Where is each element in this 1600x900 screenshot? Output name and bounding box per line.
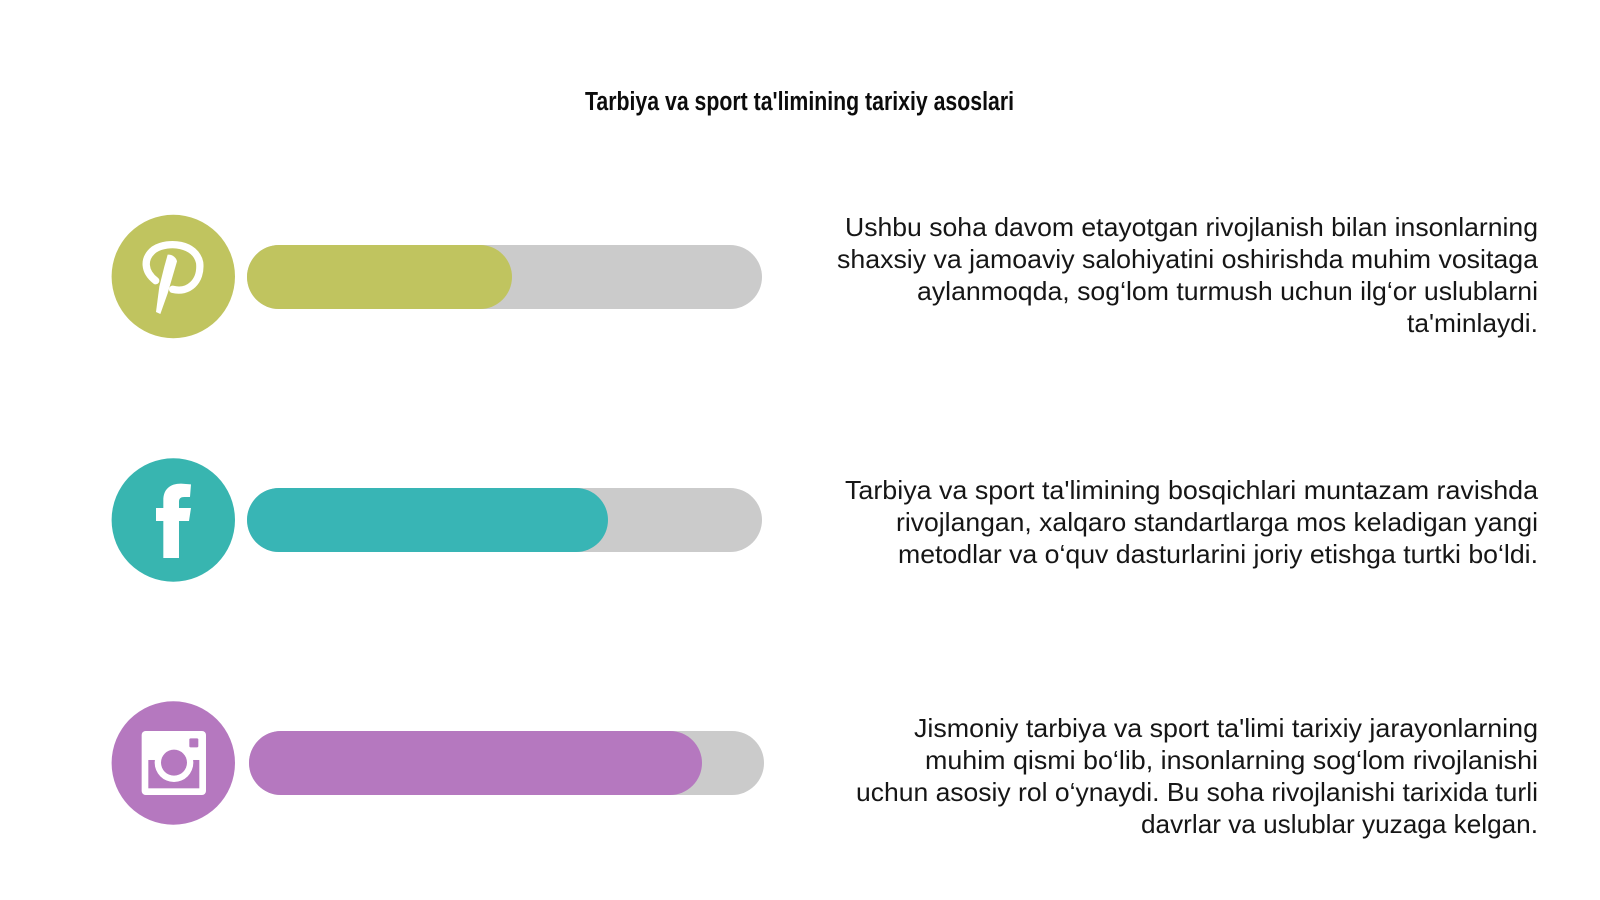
panel: row 3 — [112, 701, 1538, 839]
progress bar: teal — [247, 488, 762, 552]
text block 1 — [837, 212, 1539, 338]
text block 3: uchun asosiy rol o‘ynaydi. Bu soha rivojlanishi tarixida turli — [856, 777, 1538, 807]
text block 2: Tarbiya va sport ta'limining bosqichlari muntazam ravishda — [845, 475, 1539, 505]
text block 2 — [845, 475, 1539, 569]
title: Tarbiya va sport ta'limining tarixiy asoslari — [585, 88, 1014, 116]
text block 2: metodlar va o‘quv dasturlarini joriy etishga turtki bo‘ldi. — [898, 539, 1538, 569]
text block 1: Ushbu soha davom etayotgan rivojlanish bilan insonlarning — [845, 212, 1538, 242]
icon: facebook — [112, 458, 235, 582]
text block 1: shaxsiy va jamoaviy salohiyatini oshirishda muhim vositaga — [837, 244, 1539, 274]
progress bar: purple — [249, 731, 764, 795]
icon: pinterest — [112, 215, 235, 338]
panel: row 1 — [112, 212, 1539, 338]
text block 2: rivojlangan, xalqaro standartlarga mos keladigan yangi — [896, 507, 1538, 537]
text block 3 — [856, 713, 1538, 839]
text block 3: Jismoniy tarbiya va sport ta'limi tarixiy jarayonlarning — [914, 713, 1538, 743]
panel: row 2 — [112, 458, 1539, 582]
text block 1: ta'minlaydi. — [1407, 308, 1538, 338]
text block 3: muhim qismi bo‘lib, insonlarning sog‘lom rivojlanishi — [925, 745, 1538, 775]
icon: instagram — [112, 701, 235, 825]
text block 3: davrlar va uslublar yuzaga kelgan. — [1141, 809, 1538, 839]
progress bar: green — [247, 245, 762, 309]
text block 1: aylanmoqda, sog‘lom turmush uchun ilg‘or uslublarni — [917, 276, 1538, 306]
